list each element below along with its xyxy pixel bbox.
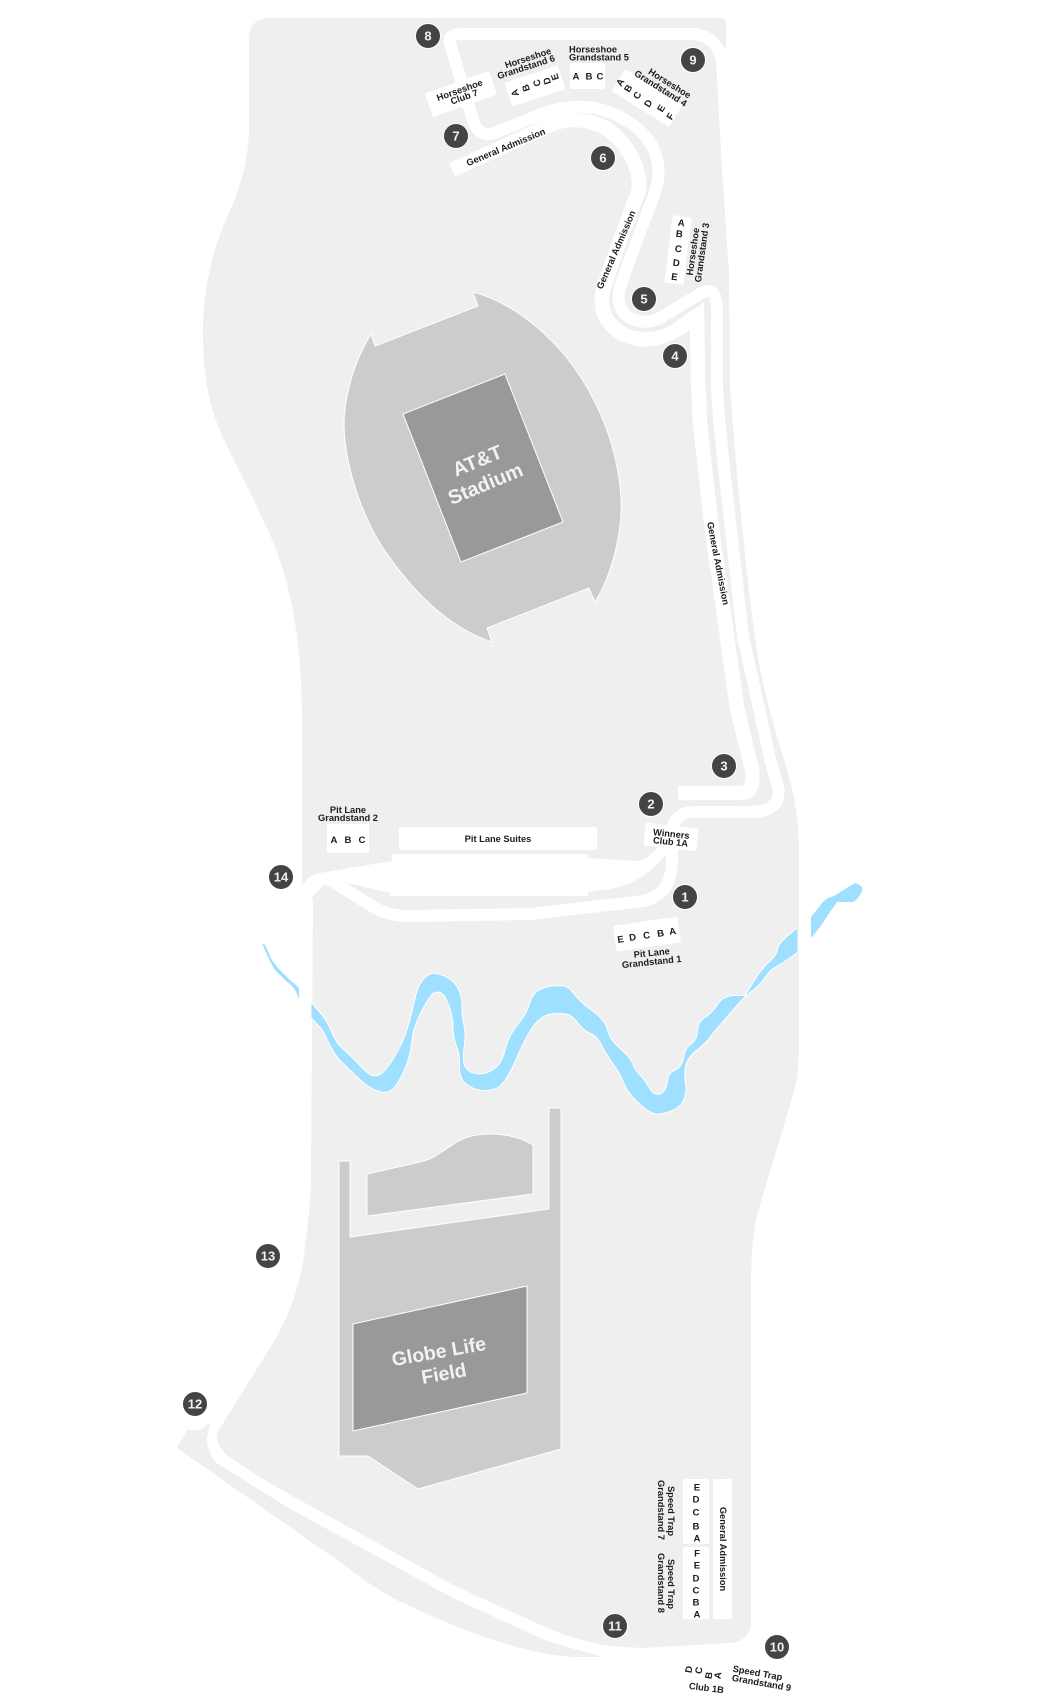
river section through grounds (311, 927, 798, 1114)
ballpark field (353, 1286, 527, 1431)
turn 8 (416, 24, 440, 48)
stadium name: Stadium (445, 459, 526, 510)
Horseshoe Grandstand 4: B (622, 83, 635, 95)
Horseshoe Grandstand 6: D (541, 76, 554, 86)
Speed Trap Grandstand 7 (656, 1479, 709, 1544)
river section east of track (811, 883, 862, 938)
Speed Trap Grandstand 9: A (713, 1671, 725, 1680)
Winners Club 1A: Club 1A (652, 835, 689, 849)
Horseshoe Grandstand 4: F (665, 111, 677, 122)
turn 8: 8 (424, 28, 432, 44)
Speed Trap Grandstand 9 (704, 1664, 792, 1693)
Pit Lane Grandstand 2: A (331, 835, 338, 846)
Pit Lane Grandstand 1: B (656, 928, 665, 940)
Horseshoe Grandstand 5: A (573, 72, 580, 82)
Horseshoe Grandstand 4: A (614, 77, 627, 89)
stadium bowl (344, 292, 621, 642)
Pit Lane Grandstand 1: E (617, 934, 625, 946)
ballpark name: Field (420, 1359, 468, 1389)
turn 13 (256, 1244, 280, 1268)
turn 12: 12 (188, 1396, 202, 1412)
Speed Trap Grandstand 8 (656, 1547, 709, 1620)
Speed Trap Grandstand 8: F (694, 1548, 700, 1560)
Horseshoe Grandstand 3: Horseshoe (685, 227, 701, 276)
Horseshoe Grandstand 5: Grandstand 5 (569, 52, 629, 62)
Speed Trap Grandstand 7: A (694, 1534, 701, 1544)
Club 1B: Club 1B (688, 1681, 725, 1695)
turn 3 (712, 754, 736, 778)
AT&T Stadium (344, 292, 621, 642)
Horseshoe Grandstand 4: E (656, 103, 669, 114)
Pit Lane Grandstand 2: Grandstand 2 (318, 813, 378, 823)
Horseshoe Club 7: Club 7 (449, 88, 479, 107)
turn 1 (672, 884, 698, 910)
General Admission south block (713, 1479, 732, 1619)
Pit Lane Grandstand 1: Grandstand 1 (621, 954, 682, 970)
stadium field (403, 374, 563, 562)
Horseshoe Grandstand 3: Grandstand 3 (693, 222, 711, 283)
ground sliver outside track (177, 1423, 603, 1657)
Horseshoe Grandstand 3: C (674, 244, 682, 255)
Speed Trap Grandstand 8: B (693, 1598, 700, 1608)
turn 4 (662, 344, 688, 368)
general admission spectator band (452, 120, 752, 793)
Pit Lane Grandstand 2: C (359, 835, 366, 846)
ballpark name: Globe Life (390, 1333, 488, 1371)
Speed Trap Grandstand 7: E (694, 1482, 701, 1494)
Horseshoe Grandstand 3 (664, 215, 711, 285)
turn 5: 5 (640, 292, 648, 306)
turn 6: 6 (599, 150, 607, 166)
Horseshoe Grandstand 3: D (672, 258, 680, 269)
turn 10 (764, 1634, 790, 1660)
turn 2: 2 (647, 796, 655, 812)
Horseshoe Grandstand 6: B (520, 83, 533, 93)
Winners Club 1A: Winners (653, 827, 690, 841)
main track loop (330, 34, 778, 916)
Pit Lane Grandstand 1: C (642, 930, 651, 942)
turn 10: 10 (770, 1640, 784, 1654)
Horseshoe Grandstand 5: Horseshoe (569, 44, 617, 54)
turn 9 (680, 48, 706, 72)
Pit Lane Grandstand 1: Pit Lane (633, 946, 670, 960)
Speed Trap Grandstand 8: C (693, 1586, 700, 1596)
Horseshoe Grandstand 4: D (642, 98, 655, 110)
turn 9: 9 (689, 52, 697, 68)
Pit Lane Grandstand 2: Pit Lane (330, 805, 366, 815)
Speed Trap Grandstand 8: Speed Trap (666, 1559, 676, 1609)
race track (302, 34, 778, 916)
Speed Trap Grandstand 7: C (693, 1508, 700, 1518)
pit lane area (302, 833, 667, 905)
turn 4: 4 (671, 348, 679, 364)
Speed Trap Grandstand 8: A (694, 1610, 701, 1620)
Pit Lane Grandstand 1: D (628, 932, 637, 944)
Pit Lane Grandstand 1 (613, 916, 682, 970)
Speed Trap Grandstand 8: Grandstand 8 (656, 1553, 666, 1613)
Pit Lane Grandstand 2: B (345, 835, 352, 846)
Club 1B: C (694, 1666, 706, 1675)
turn 3: 3 (720, 758, 728, 774)
turn 7 (444, 124, 468, 148)
Horseshoe Grandstand 3: E (670, 272, 679, 283)
General Admission south block: General Admission (718, 1507, 728, 1592)
Speed Trap Grandstand 9: B (704, 1671, 716, 1680)
turn 14: 14 (274, 870, 289, 884)
General Admission back straight label: General Admission (705, 521, 731, 606)
Speed Trap Grandstand 7: Grandstand 7 (656, 1480, 666, 1540)
Horseshoe Grandstand 6: A (509, 88, 522, 98)
turn 14 (268, 864, 294, 890)
Horseshoe Grandstand 4: C (631, 90, 644, 102)
Horseshoe Grandstand 4: Grandstand 4 (633, 68, 689, 109)
river section west of track (262, 943, 299, 1000)
turn 12 (182, 1392, 208, 1416)
Speed Trap Grandstand 8: D (693, 1574, 700, 1584)
Horseshoe Grandstand 6: E (549, 71, 562, 82)
Club 1B (684, 1665, 725, 1695)
Speed Trap Grandstand 9: Speed Trap (732, 1664, 783, 1682)
Pit Lane Grandstand 2 (318, 805, 378, 853)
turn 11: 11 (608, 1618, 622, 1634)
ballpark name (390, 1333, 488, 1389)
Horseshoe Grandstand 6 (496, 46, 565, 107)
Horseshoe Grandstand 5 (569, 44, 629, 89)
General Admission north straight label: General Admission (465, 126, 547, 168)
Speed Trap Grandstand 9: Grandstand 9 (731, 1673, 792, 1693)
turn 1: 1 (681, 890, 689, 904)
Horseshoe Club 7: Horseshoe (435, 77, 484, 103)
Speed Trap Grandstand 7: B (693, 1522, 700, 1532)
Horseshoe Grandstand 3: A (677, 218, 685, 229)
turn 2 (638, 792, 664, 816)
turn markers (182, 24, 790, 1660)
Horseshoe Grandstand 6: C (531, 78, 544, 88)
Horseshoe Grandstand 5: C (597, 72, 604, 82)
turn 13: 13 (261, 1248, 275, 1264)
turn 7: 7 (452, 128, 460, 144)
Speed Trap Grandstand 7: D (693, 1494, 700, 1506)
stadium name: AT&T (450, 441, 506, 482)
Speed Trap Grandstand 7: Speed Trap (666, 1486, 676, 1536)
Horseshoe Grandstand 4 (611, 66, 693, 127)
ballpark upper section (367, 1134, 533, 1216)
Horseshoe Club 7 (425, 71, 497, 117)
Horseshoe Grandstand 3: B (675, 229, 683, 240)
Club 1B: D (684, 1665, 696, 1674)
turn 5 (632, 286, 656, 312)
turn 11 (602, 1614, 628, 1638)
Speed Trap Grandstand 8: E (694, 1560, 701, 1572)
turn 6 (590, 146, 616, 170)
ground area (203, 18, 799, 1648)
Globe Life Field (339, 1108, 561, 1489)
General Admission esses label: General Admission (595, 209, 638, 290)
Horseshoe Grandstand 6: Horseshoe (504, 46, 552, 70)
river (262, 883, 862, 1114)
ballpark outline (339, 1108, 561, 1489)
Winners Club 1A (643, 823, 699, 851)
Horseshoe Grandstand 5: B (586, 72, 593, 82)
Pit Lane Grandstand 1: A (668, 926, 677, 938)
Pit Lane Suites (399, 827, 597, 850)
Pit Lane Suites: Pit Lane Suites (465, 834, 531, 844)
Horseshoe Grandstand 4: Horseshoe (647, 66, 693, 100)
Horseshoe Grandstand 6: Grandstand 6 (496, 53, 556, 81)
